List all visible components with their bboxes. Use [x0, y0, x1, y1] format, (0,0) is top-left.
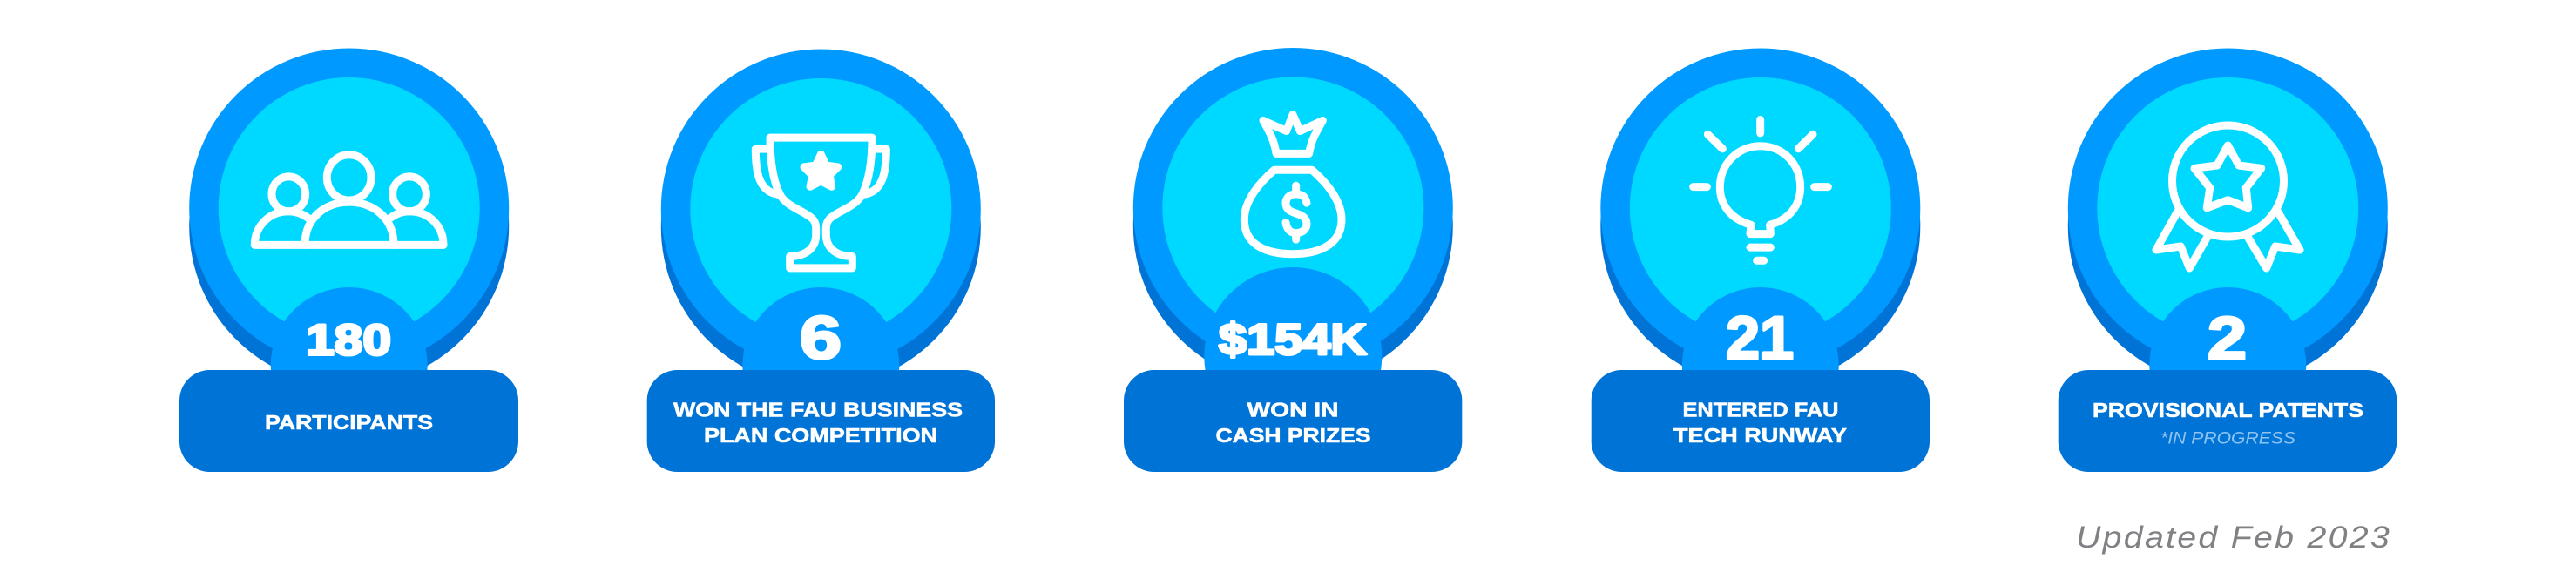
label: won in cash prizes: WON IN — [1247, 399, 1338, 421]
label: entered FAU tech runway: TECH RUNWAY — [1673, 424, 1847, 447]
label: participants: PARTICIPANTS — [265, 411, 433, 434]
label pill — [1592, 370, 1930, 472]
label: won the FAU business plan competition — [673, 399, 963, 447]
label: won in cash prizes — [1216, 399, 1371, 447]
panel: tech runway — [1592, 49, 1930, 472]
number: 6: 6 — [800, 304, 842, 372]
number: 21: 21 — [1726, 304, 1794, 372]
badge circle — [2068, 49, 2388, 444]
panel: participants — [179, 49, 518, 472]
number: $154K: $154K — [1219, 315, 1367, 364]
number: 180: 180 — [306, 315, 391, 364]
label: entered FAU tech runway: ENTERED FAU — [1683, 399, 1838, 421]
icon: award ribbon — [2156, 125, 2300, 268]
label pill — [179, 370, 518, 472]
icon: money bag with crown — [1244, 115, 1342, 254]
update date note: Updated Feb 2023 — [2076, 521, 2391, 555]
icon: light bulb — [1694, 119, 1828, 260]
label: won the FAU business plan competition: WON THE FAU BUSINESS — [673, 399, 963, 421]
icon: trophy — [755, 138, 886, 268]
badge circle — [189, 49, 509, 444]
label: provisional patents: PROVISIONAL PATENTS — [2093, 399, 2363, 421]
label: entered FAU tech runway — [1673, 399, 1847, 447]
panel: business plan competition — [647, 49, 995, 472]
badge circle — [1133, 48, 1453, 445]
label: won in cash prizes: CASH PRIZES — [1216, 424, 1371, 447]
label: won the FAU business plan competition: PLAN COMPETITION — [704, 424, 937, 447]
number: 2: 2 — [2208, 305, 2247, 373]
label pill — [2059, 370, 2397, 472]
panel: cash prizes — [1124, 48, 1462, 472]
badge circle — [661, 49, 981, 444]
badge circle — [1600, 49, 1920, 444]
panel: provisional patents — [2059, 49, 2397, 472]
label pill — [647, 370, 995, 472]
label pill — [1124, 370, 1462, 472]
icon: three people — [254, 155, 443, 245]
note: in progress: *IN PROGRESS — [2160, 428, 2295, 448]
